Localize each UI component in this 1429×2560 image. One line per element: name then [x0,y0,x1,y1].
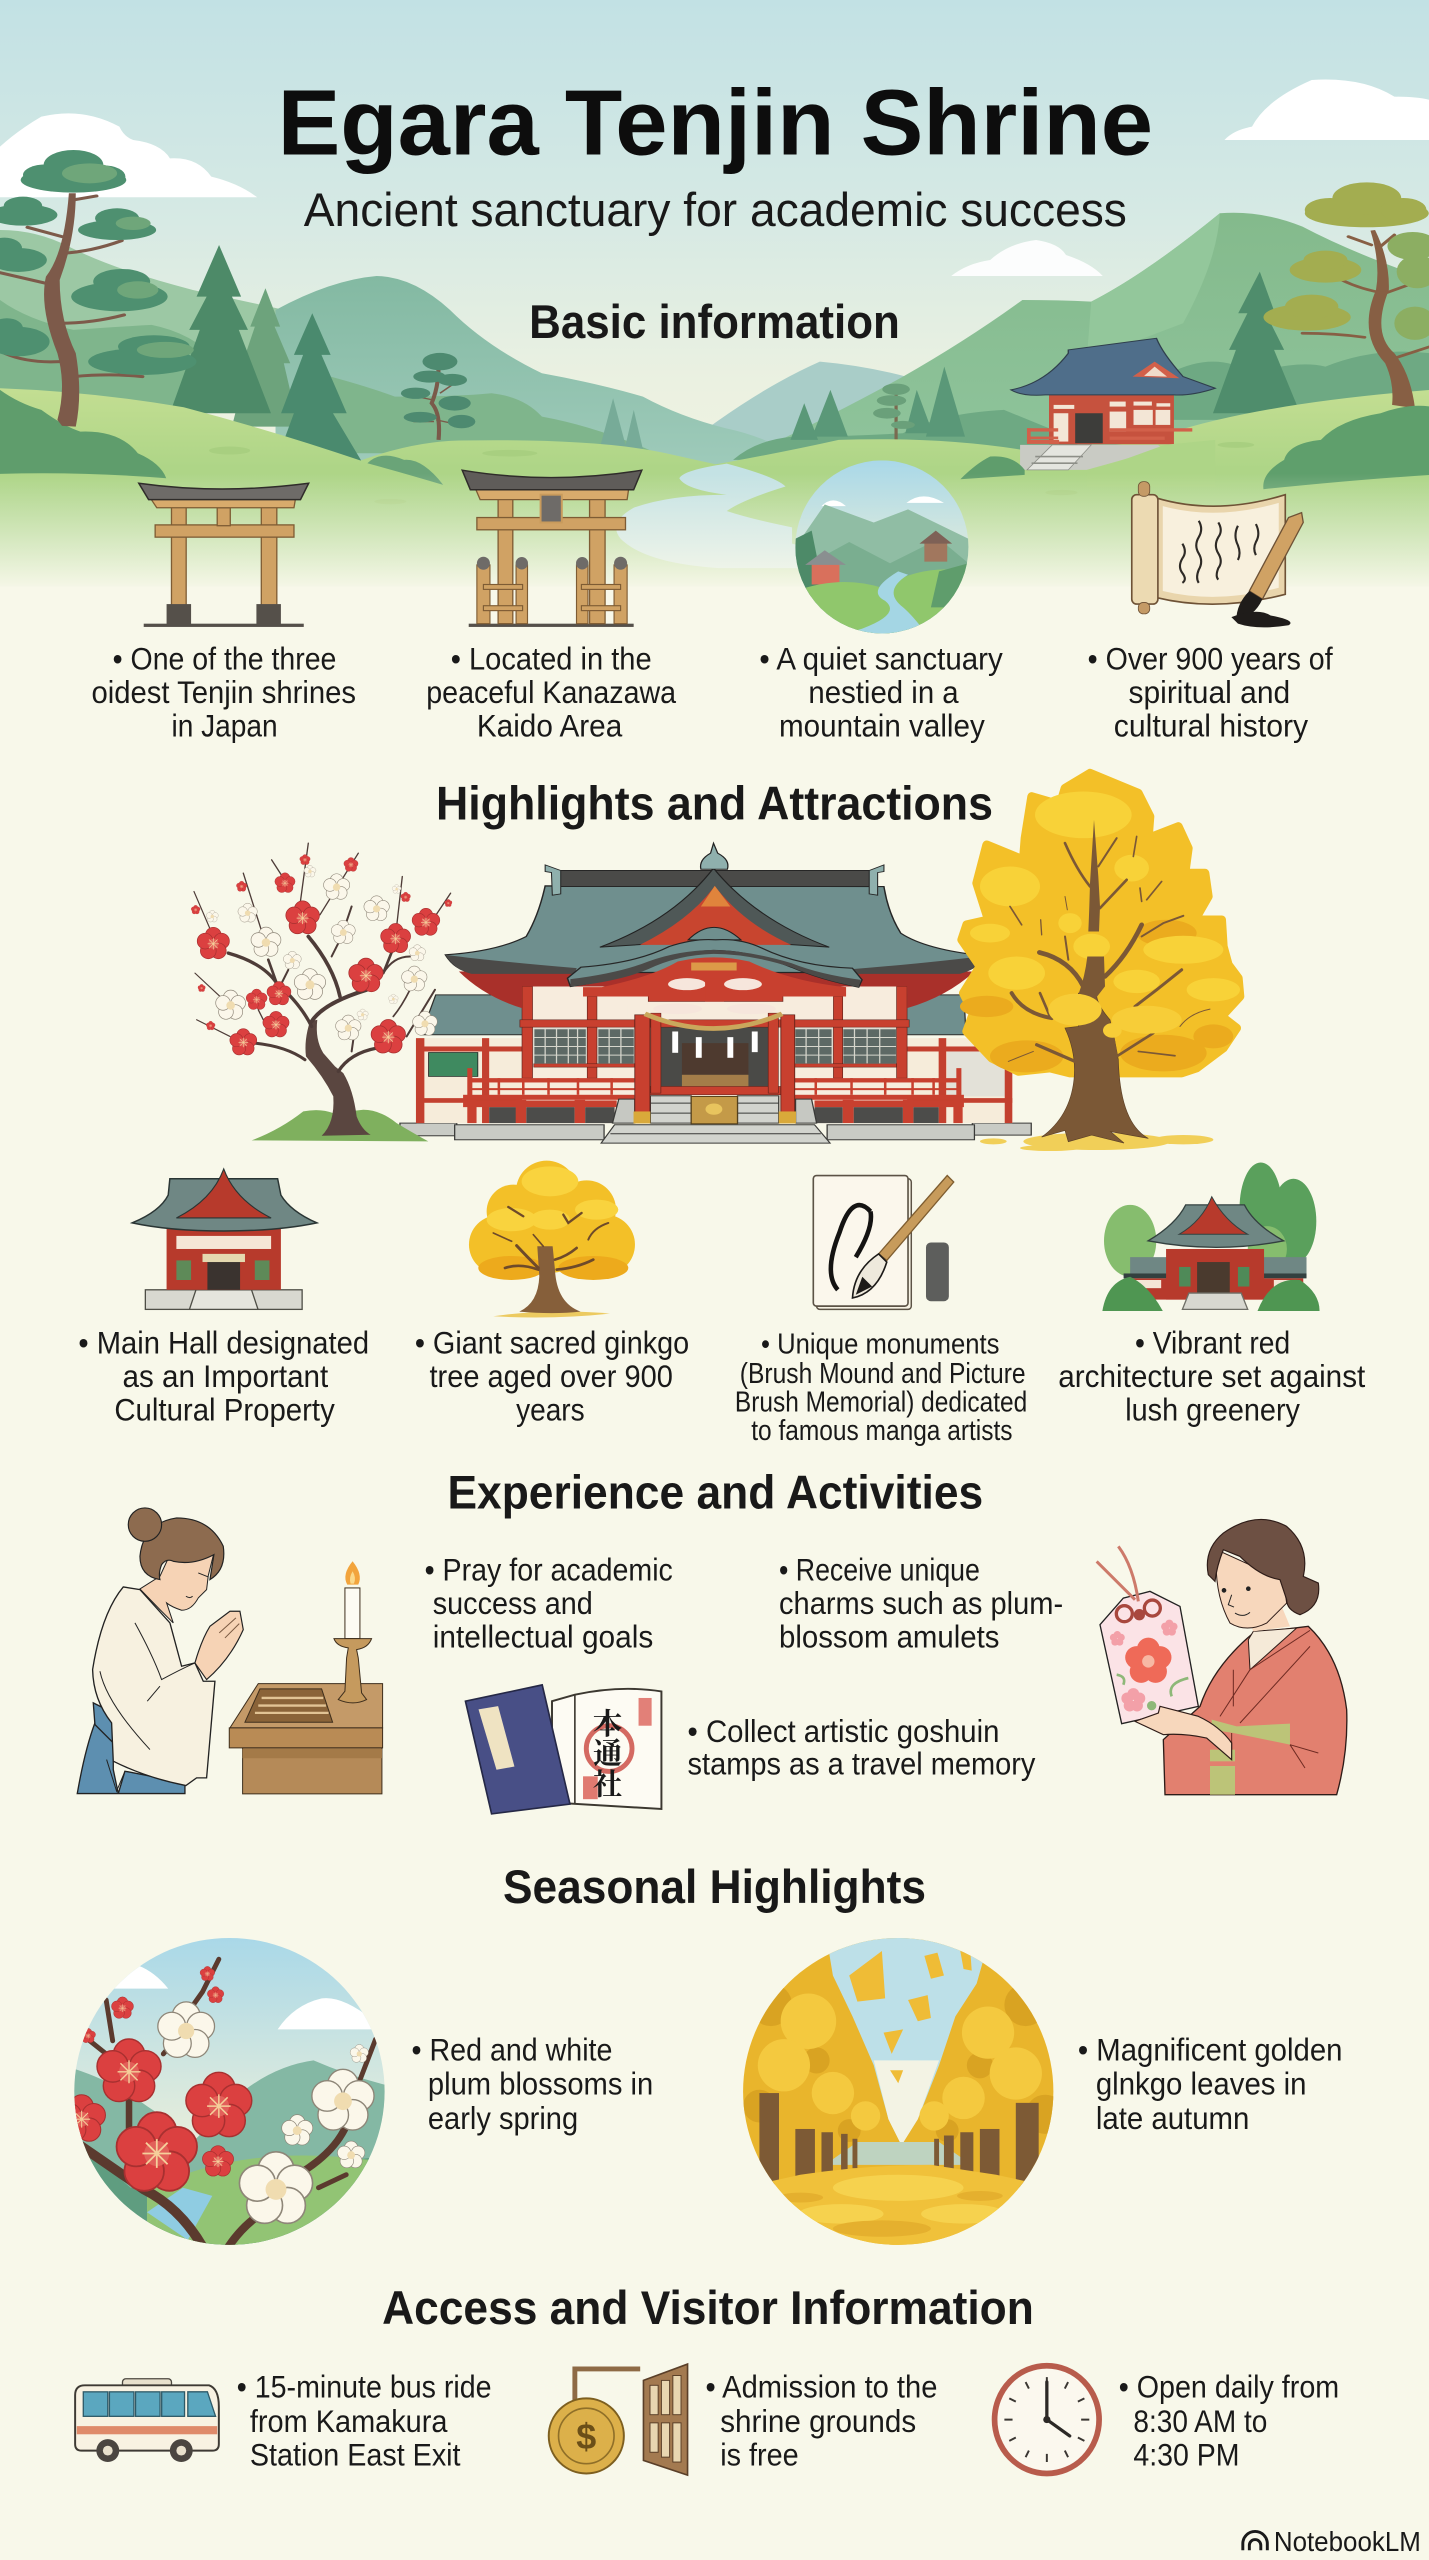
pine trunk [1303,230,1429,408]
ginkgo tree [960,773,1240,1151]
caption: pray: intellectual goals [433,1619,653,1654]
icon: goshuin book: 通 [593,1730,622,1772]
pine canopies [1263,182,1429,331]
steps [601,1096,830,1143]
caption: location: Kaido Area [477,708,623,743]
right bushes [1263,406,1429,489]
branches and trunk [1008,820,1210,1143]
caption: goshuin: stamps as a travel memory [688,1747,1036,1782]
caption: location: • Located in the [451,641,652,676]
caption: monuments: (Brush Mound and Picture [740,1358,1026,1390]
omamori amulet [1097,1546,1232,1760]
offering box [691,1096,737,1124]
plum tree [191,843,452,1141]
caption: plum: • Red and white [412,2032,612,2067]
bright leaf patches [970,791,1240,1001]
caption: vibrant red [1058,1325,1366,1427]
caption: main hall: Cultural Property [114,1392,335,1427]
illustration: ginkgo avenue circle [741,1927,1065,2247]
canopy shading [743,1984,1065,2142]
left cloud [0,113,257,197]
heading: access: Access and Visitor Information [382,2282,1034,2335]
caption: admission [706,2370,937,2472]
small bush [960,456,1025,479]
caption: location [426,641,677,743]
caption: oldest shrines: oidest Tenjin shrines [91,675,356,710]
icon: goshuin book: 社 [593,1761,622,1803]
praying hands [195,1611,243,1680]
caption: main hall [78,1325,369,1427]
kimono woman [1163,1519,1347,1795]
illustration: woman with amulet [1097,1519,1347,1795]
pine trunk [0,193,142,427]
illustration: plum blossom circle [58,1936,392,2253]
basic info captions [91,641,1333,743]
icon: small ginkgo [469,1161,635,1317]
left hill [0,388,726,587]
caption: ginkgo [415,1325,689,1427]
caption: hours [1119,2370,1339,2472]
caption: quiet sanctuary: • A quiet sanctuary [759,641,1003,676]
heading: seasonal highlights: Seasonal Highlights [503,1861,926,1914]
golden leaf ground [772,2164,1024,2245]
heading: experience: Experience and Activities [447,1467,983,1520]
icon: plain torii gate [139,483,309,627]
stone base [400,1123,1031,1140]
heading: basic information: Basic information [529,296,900,349]
shide paper [672,1031,758,1058]
middle cloud [951,240,1103,276]
far left hill [0,230,285,407]
finial [701,843,728,869]
distant mountain [670,362,908,473]
caption: history: spiritual and [1129,675,1290,710]
side wings [416,995,1012,1123]
caption: hours: 4:30 PM [1133,2437,1240,2472]
caption: admission: is free [720,2437,799,2472]
icon: torii with fence posts [462,470,642,627]
main hall [400,843,1031,1143]
caption: bus: • 15-minute bus ride [237,2370,492,2405]
kanji stamp: 本 [593,1701,622,1743]
caption: monuments [735,1328,1027,1447]
caption: ginkgo leaves: • Magnificent golden [1078,2032,1342,2067]
pale conifer [232,288,299,427]
caption: monuments: Brush Memorial) dedicated [735,1386,1027,1418]
caption: location: peaceful Kanazawa [426,675,677,710]
caption: admission: shrine grounds [720,2404,916,2439]
horizon [832,2142,960,2165]
main roof [445,886,985,972]
robe [93,1587,215,1786]
caption: ginkgo leaves: late autumn [1096,2101,1249,2136]
pine canopies [0,150,197,375]
caption: ginkgo: • Giant sacred ginkgo [415,1325,689,1360]
far conifers [599,398,644,453]
small central pine [401,353,475,440]
icon: scroll and brush [1132,482,1303,627]
midground bushes [0,300,657,453]
caption: charms: charms such as plum- [779,1586,1063,1621]
arched lower roof [567,940,862,987]
trunks [759,2093,1039,2188]
icon: goshuin book [465,1685,661,1814]
right mountain [724,213,1429,467]
woman praying [77,1508,243,1794]
caption: quiet sanctuary: mountain valley [779,708,985,743]
altar [229,1684,383,1794]
icon: coin and open door [549,2364,688,2475]
trunk and branches [519,1246,581,1313]
caption: bus: from Kamakura [250,2404,448,2439]
caption: admission: • Admission to the [706,2370,937,2405]
right half of scenery [703,80,1429,587]
icon: coin and open door: $ [576,2416,596,2457]
lattice windows [534,1029,897,1064]
ridge [545,865,884,895]
notebooklm watermark: NotebookLM [1274,2526,1421,2557]
caption: oldest shrines [91,641,356,743]
leaf litter [980,1133,1213,1151]
caption: goshuin: • Collect artistic goshuin [688,1714,999,1749]
caption: quiet sanctuary [759,641,1003,743]
hill piece in front of temple base [1087,440,1215,487]
left half of scenery [0,113,785,587]
left bushes [0,390,166,478]
canopy base [962,773,1240,1073]
caption: history: cultural history [1114,708,1309,743]
icon: brush and paper monument [813,1176,954,1309]
front gable [600,868,829,947]
landscape header scene [0,0,1429,591]
caption: ginkgo leaves [1078,2032,1342,2136]
candle [334,1561,372,1703]
river [616,464,857,568]
heading: highlights: Highlights and Attractions [436,778,993,831]
face and neck [140,1553,214,1623]
central mountain [276,276,785,473]
top right cloud [1224,80,1429,140]
caption: ginkgo: years [516,1392,585,1427]
central walls [522,986,907,1123]
highlight captions [78,1325,1366,1447]
doorway [661,1026,768,1088]
central bush [367,456,443,485]
sky gap [829,1938,982,2142]
right small pine [873,384,915,442]
caption: bus: Station East Exit [250,2437,461,2472]
icon: clock [995,2366,1099,2473]
caption: plum: early spring [428,2101,578,2136]
shimenawa rope [645,1014,782,1028]
caption: oldest shrines: in Japan [171,708,278,743]
foreground leaf clumps [1048,994,1182,1038]
caption: history: • Over 900 years of [1088,641,1333,676]
caption: monuments: • Unique monuments [761,1328,999,1360]
hair [140,1518,224,1580]
caption: history [1088,641,1333,743]
conifer one [170,245,271,413]
illustration: praying woman at altar [77,1508,383,1794]
caption: hours: 8:30 AM to [1133,2404,1267,2439]
caption: main hall: as an Important [122,1359,329,1394]
caption: pray [425,1552,673,1654]
under-floor panels [489,1107,939,1123]
caption: plum [412,2032,653,2136]
caption: hours: • Open daily from [1119,2370,1339,2405]
caption: monuments: to famous manga artists [751,1415,1013,1447]
subtitle: Ancient sanctuary for academic success [304,184,1127,237]
caption: bus [237,2370,492,2472]
red arch panel [583,957,846,996]
caption: goshuin [688,1714,1036,1782]
icon: hall with greenery [1102,1162,1320,1311]
small temple [1011,338,1215,470]
orange lower shading [960,920,1233,1072]
caption: ginkgo: tree aged over 900 [430,1359,673,1394]
title: Egara Tenjin Shrine [278,70,1153,174]
icon: bus [75,2379,219,2462]
caption: quiet sanctuary: nestied in a [808,675,959,710]
caption: charms: blossom amulets [779,1619,999,1654]
hill shadows [1045,442,1254,495]
caption: charms: • Receive unique [779,1552,980,1587]
caption: pray: success and [433,1586,593,1621]
dark eave edges [445,955,985,974]
under-eave red [459,971,974,1008]
fade into cream [0,473,1429,591]
illustration: main hall with trees [191,773,1240,1151]
hill shadows [209,447,537,504]
right hill [703,390,1429,587]
caption: oldest shrines: • One of the three [113,641,336,676]
icon: valley in circle [795,460,968,640]
midground greenery [733,352,1429,460]
caption: vibrant red: lush greenery [1125,1392,1300,1427]
caption: pray: • Pray for academic [425,1552,673,1587]
caption: vibrant red: architecture set against [1058,1359,1366,1394]
right conifers [790,367,965,440]
big right conifer [1213,272,1300,413]
conifer two [276,313,363,463]
icon: small main hall [132,1169,317,1309]
caption: ginkgo leaves: glnkgo leaves in [1096,2067,1307,2102]
red frame [520,986,909,1095]
falling leaves [849,1948,972,2083]
railing [463,1068,964,1100]
caption: main hall: • Main Hall designated [78,1325,369,1360]
caption: vibrant red: • Vibrant red [1135,1325,1290,1360]
foliage [469,1161,635,1275]
caption: charms [779,1552,1063,1654]
caption: plum: plum blossoms in [428,2067,653,2102]
big front pillars [635,1015,795,1113]
